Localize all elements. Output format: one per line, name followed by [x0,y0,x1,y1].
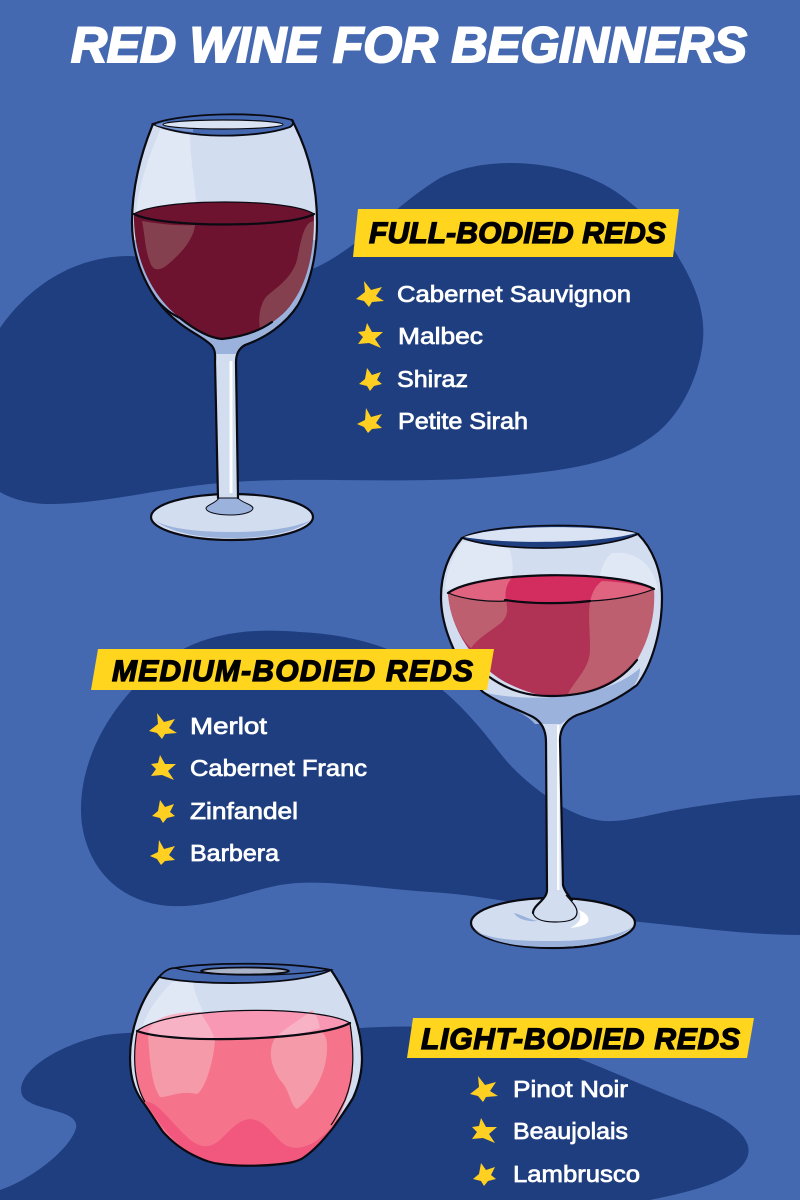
list: medium-bodied varieties [149,713,367,866]
rim [153,114,293,136]
star [150,840,175,865]
foot [471,898,635,948]
rim [159,964,331,983]
item: Merlot [190,713,268,739]
item: Beaujolais [513,1118,628,1144]
item: Malbec [398,323,483,349]
item: Cabernet Sauvignon [397,281,631,307]
heading: full-bodied reds: FULL-BODIED REDS [369,217,666,250]
item: Pinot Noir [513,1076,628,1102]
bowl glass [441,534,662,922]
outline [130,970,362,1166]
stem highlight [557,725,560,890]
item: Lambrusco [513,1161,640,1187]
rim [462,525,638,548]
star [359,368,382,391]
wine [135,1010,353,1166]
star [149,713,177,739]
star [470,1076,498,1102]
foot [151,494,313,540]
item: Cabernet Franc [190,755,367,781]
heading: full-bodied reds [353,209,679,257]
title: RED WINE FOR BEGINNERS [71,17,747,73]
star [472,1118,497,1143]
wine glass: full-bodied [132,114,317,540]
item: Petite Sirah [398,408,528,434]
star [151,755,176,780]
heading: light-bodied reds: LIGHT-BODIED REDS [421,1023,740,1056]
wine [134,202,314,339]
background blob: light-bodied [0,1027,749,1200]
wine glass: medium-bodied [441,525,662,948]
bowl glass [130,970,362,1166]
bowl glass [132,120,317,498]
star [358,323,383,348]
star [357,408,382,433]
list: light-bodied varieties [470,1076,640,1187]
wine [448,575,654,696]
heading: medium-bodied reds: MEDIUM-BODIED REDS [112,655,473,688]
star [356,281,384,307]
wine glass: light-bodied [130,964,362,1166]
outline [441,534,662,913]
background blob: full-bodied [0,163,703,504]
star [152,800,175,823]
outline [132,120,317,498]
item: Barbera [190,840,280,866]
list: full-bodied varieties [356,281,631,434]
star [473,1163,496,1186]
stem highlight [230,361,232,493]
item: Zinfandel [190,798,298,824]
foot bump [206,498,253,515]
item: Shiraz [397,366,468,392]
background blob: medium-bodied [81,631,800,935]
